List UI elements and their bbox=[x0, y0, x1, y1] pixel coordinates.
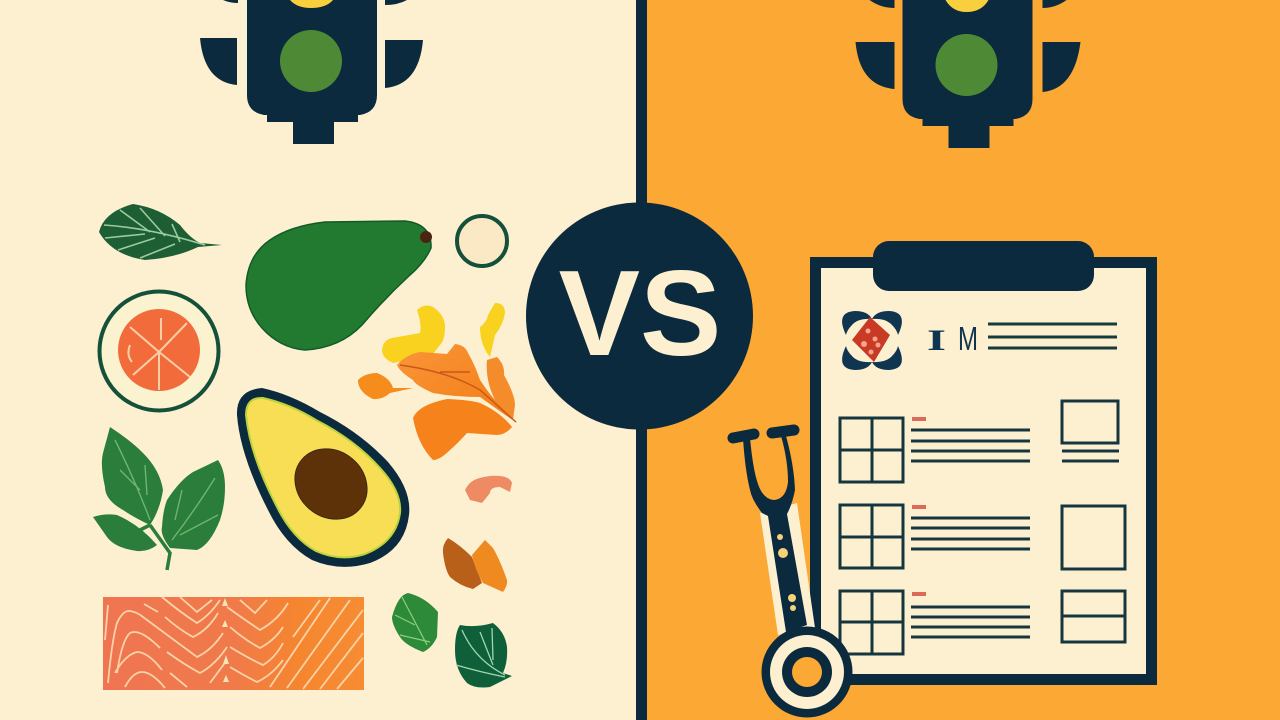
header label: I bbox=[927, 324, 946, 357]
panel: left cream background bbox=[0, 0, 636, 720]
icon: autumn leaves bbox=[358, 303, 517, 460]
clipboard clip bbox=[873, 241, 1094, 291]
yellow sliver bbox=[480, 303, 505, 357]
icon: basil leaves bbox=[93, 427, 225, 570]
icon: right traffic light bbox=[856, 0, 1080, 148]
red markers bbox=[912, 419, 926, 594]
lower blob bbox=[413, 399, 512, 460]
icon: small pink slice bbox=[465, 476, 512, 503]
icon: dark leaf bbox=[455, 623, 512, 688]
icon: avocado half bbox=[237, 388, 409, 567]
icon: whole avocado bbox=[246, 221, 432, 350]
center divider bbox=[636, 0, 647, 720]
body dots bbox=[777, 534, 796, 611]
icon: citrus slice bbox=[100, 292, 218, 410]
row 3 bbox=[840, 591, 1125, 654]
clipboard bbox=[816, 241, 1152, 680]
chest piece bbox=[762, 626, 852, 718]
VS badge bbox=[526, 202, 753, 430]
orange upper leaf bbox=[397, 344, 517, 423]
icon: left traffic light bbox=[200, 0, 423, 144]
icon: medical emblem bbox=[842, 311, 902, 370]
orange strip bbox=[487, 357, 515, 420]
icon: green leaf bbox=[392, 593, 438, 652]
icon: salmon fillet bbox=[103, 597, 364, 690]
icon: small leaf bbox=[99, 204, 222, 260]
header label: M bbox=[958, 320, 978, 357]
VS text: VS bbox=[559, 245, 721, 381]
row 1 bbox=[840, 401, 1119, 482]
cream highlight bbox=[760, 503, 815, 635]
row 2 bbox=[840, 505, 1125, 569]
icon: small cream circle bbox=[457, 216, 507, 266]
stethoscope body bbox=[743, 436, 807, 632]
icon: stethoscope bbox=[733, 430, 852, 718]
header lines bbox=[988, 324, 1117, 348]
clipboard board bbox=[816, 262, 1152, 680]
small left petal bbox=[358, 373, 413, 399]
panel: right orange background bbox=[647, 0, 1280, 720]
earpieces bbox=[733, 430, 794, 438]
icon: nut pieces bbox=[443, 538, 507, 592]
yellow petal bbox=[382, 306, 445, 363]
header label bbox=[927, 320, 978, 357]
